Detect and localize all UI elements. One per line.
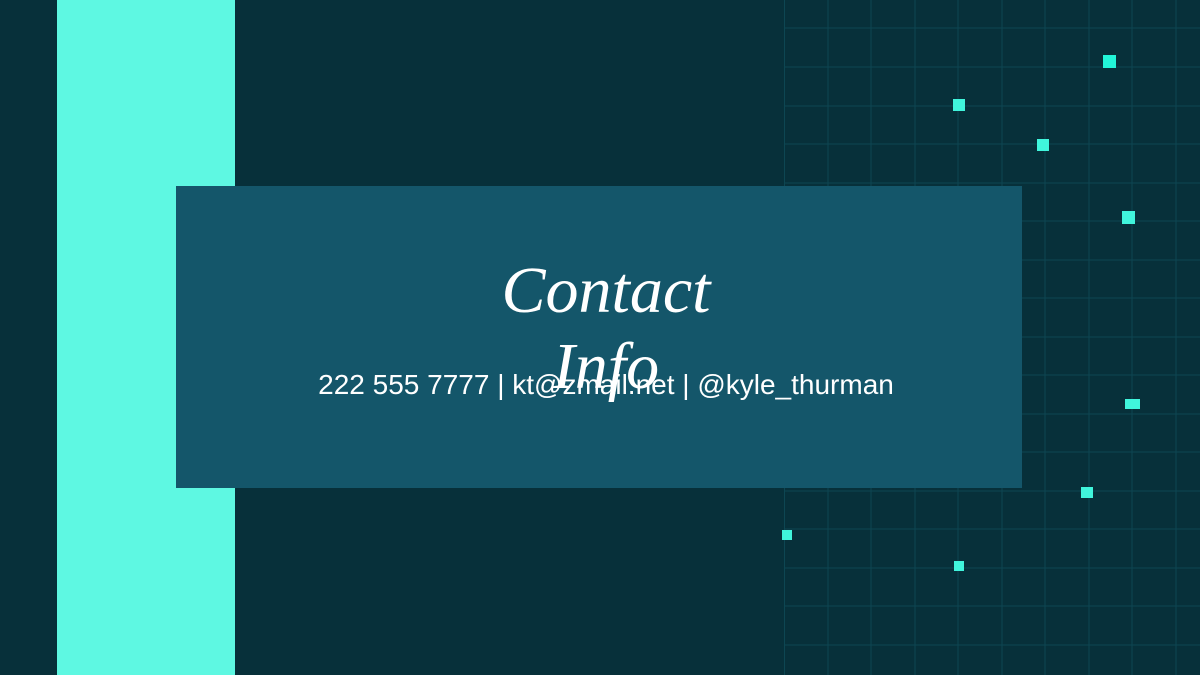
cyan vertical band bbox=[57, 0, 235, 675]
background grid bbox=[784, 0, 1200, 675]
panel: contact card bbox=[176, 186, 1022, 488]
title: Info bbox=[553, 330, 659, 403]
title bbox=[502, 254, 712, 403]
contact details: 222 555 7777 | kt@zmail.net | @kyle_thurman bbox=[318, 369, 894, 400]
title: Contact bbox=[502, 254, 710, 327]
